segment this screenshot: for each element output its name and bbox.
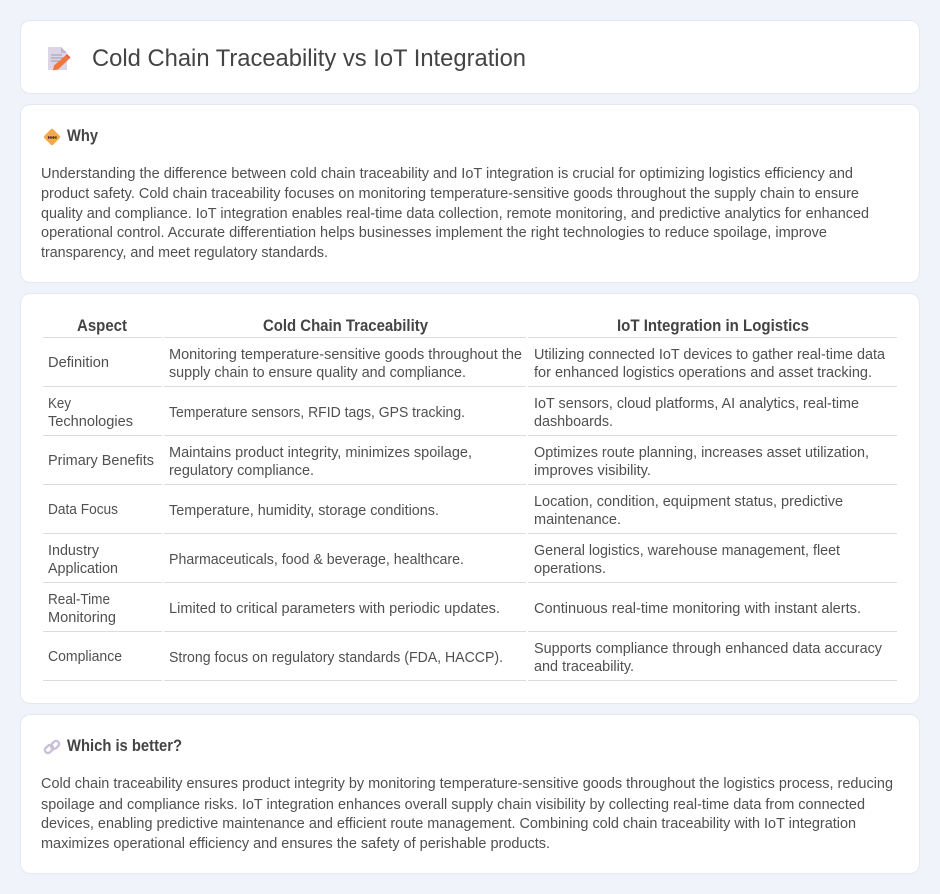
- table column: aspect labels: Primary Benefits: [48, 453, 154, 469]
- table header: aspect: Aspect: [77, 317, 127, 335]
- panel: why: [20, 104, 920, 283]
- heading: which is better: Which is better?: [67, 737, 182, 755]
- icon: road-sign diamond: [44, 128, 60, 146]
- text block: which is better: maximizes operational efficiency and ensures the safety of perishable products.: [41, 836, 550, 852]
- table column: cold chain traceability cells: Monitoring temperature-sensitive goods throughout the: [169, 347, 522, 363]
- table column: iot integration cells: Location, condition, equipment status, predictive: [534, 494, 843, 510]
- table column: cold chain traceability cells: supply chain to ensure quality and compliance.: [169, 365, 466, 381]
- table column: iot integration cells: [534, 347, 885, 675]
- text block: why: [41, 166, 869, 261]
- text block: which is better: Cold chain traceability ensures product integrity by monitoring temperature-sensitive goods throughout the logistics process, reducing: [41, 776, 893, 792]
- table column: aspect labels: Industry: [48, 543, 100, 559]
- table column: iot integration cells: for enhanced logistics operations and asset tracking.: [534, 365, 872, 381]
- table column: aspect labels: Real-Time: [48, 592, 110, 608]
- table column: iot integration cells: IoT sensors, cloud platforms, AI analytics, real-time: [534, 396, 859, 412]
- table column: cold chain traceability cells: regulatory compliance.: [169, 463, 314, 479]
- panel: comparison table: [20, 293, 920, 704]
- table column: aspect labels: Application: [48, 561, 118, 577]
- icon: document with pencil: [48, 47, 70, 70]
- table column: iot integration cells: maintenance.: [534, 512, 621, 528]
- table column: iot integration cells: Continuous real-time monitoring with instant alerts.: [534, 601, 861, 617]
- table column: cold chain traceability cells: Pharmaceuticals, food & beverage, healthcare.: [169, 552, 464, 568]
- heading: why: Why: [67, 127, 99, 145]
- text block: why: product safety. Cold chain traceability focuses on monitoring temperature-sensitive goods throughout the supply chain to ensure: [41, 186, 859, 202]
- table column: iot integration cells: and traceability.: [534, 659, 634, 675]
- table column: aspect labels: Key: [48, 396, 72, 412]
- table column: aspect labels: Data Focus: [48, 502, 118, 518]
- table column: iot integration cells: operations.: [534, 561, 606, 577]
- table column: cold chain traceability cells: Temperature sensors, RFID tags, GPS tracking.: [169, 405, 465, 421]
- table column: iot integration cells: Utilizing connected IoT devices to gather real-time data: [534, 347, 885, 363]
- table column: iot integration cells: improves visibility.: [534, 463, 651, 479]
- table column: cold chain traceability cells: Maintains product integrity, minimizes spoilage,: [169, 445, 472, 461]
- table column: aspect labels: Definition: [48, 355, 109, 371]
- table header: iot integration: IoT Integration in Logistics: [617, 317, 809, 335]
- table column: cold chain traceability cells: [169, 347, 522, 666]
- table column: iot integration cells: Optimizes route planning, increases asset utilization,: [534, 445, 869, 461]
- text block: which is better: [41, 776, 893, 852]
- table column: cold chain traceability cells: Strong focus on regulatory standards (FDA, HACCP).: [169, 650, 503, 666]
- text block: which is better: devices, enabling predictive maintenance and efficient route management. Combining cold chain traceability with IoT integration: [41, 816, 856, 832]
- text block: why: quality and compliance. IoT integration enables real-time data collection, remote monitoring, and predictive analytics for enhanced: [41, 206, 869, 222]
- text block: why: Understanding the difference between cold chain traceability and IoT integration is crucial for optimizing logistics efficiency and: [41, 166, 853, 182]
- table column: iot integration cells: dashboards.: [534, 414, 613, 430]
- panel: which is better: [20, 714, 920, 874]
- text block: why: operational control. Accurate differentiation helps businesses implement the right technologies to reduce spoilage, improve: [41, 225, 827, 241]
- text block: why: transparency, and meet regulatory standards.: [41, 245, 328, 261]
- table column: iot integration cells: Supports compliance through enhanced data accuracy: [534, 641, 883, 657]
- panel: header: [20, 20, 920, 94]
- table header: cold chain traceability: Cold Chain Traceability: [263, 317, 429, 335]
- table column: aspect labels: Monitoring: [48, 610, 116, 626]
- table column: cold chain traceability cells: Temperature, humidity, storage conditions.: [169, 503, 439, 519]
- title: Cold Chain Traceability vs IoT Integration: [92, 45, 526, 72]
- table column: aspect labels: Compliance: [48, 649, 122, 665]
- table column: aspect labels: [48, 355, 154, 665]
- table column: iot integration cells: General logistics, warehouse management, fleet: [534, 543, 840, 559]
- text block: which is better: spoilage and compliance risks. IoT integration enhances overall supply chain visibility by collecting real-time data from connected: [41, 797, 865, 813]
- icon: chain link: [44, 740, 60, 754]
- table column: aspect labels: Technologies: [48, 414, 133, 430]
- table column: cold chain traceability cells: Limited to critical parameters with periodic updates.: [169, 601, 500, 617]
